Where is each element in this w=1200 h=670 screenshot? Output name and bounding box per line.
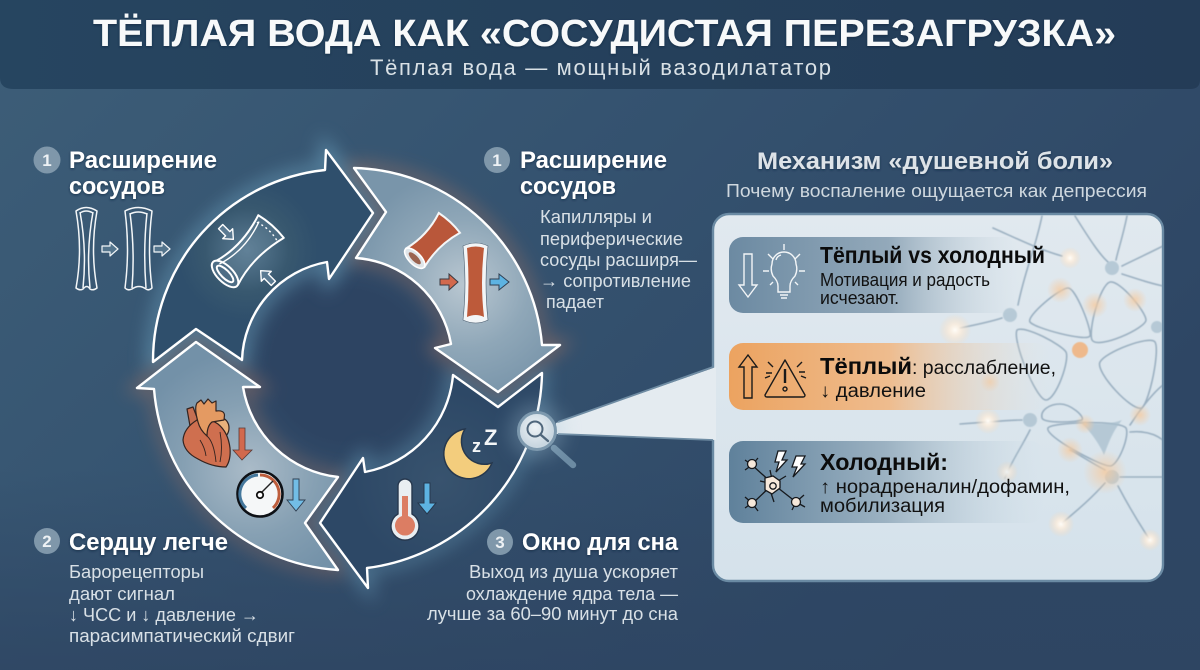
neuron network [939,216,1163,551]
body: падает [546,292,604,312]
badge [34,146,60,174]
body: : расслабление, [912,358,1056,379]
subtitle: Тёплая вода — мощный вазодилататор [370,55,831,80]
icon: red tube [400,212,461,272]
badge: 1 [492,151,502,170]
badge: 2 [42,532,52,551]
badge: 1 [42,151,52,170]
arrow: step 1 light [354,168,560,392]
icon: gauge [238,472,282,516]
title: Холодный: [820,449,948,475]
sub heading: Почему воспаление ощущается как депрессия [726,181,1147,201]
narrow vessel [76,208,97,290]
icon: vessels narrow to wide [76,208,170,290]
banner background [0,0,1200,89]
body [820,358,1056,402]
body [427,562,679,624]
icon: blue down arrow [418,483,436,514]
heading: сосудов [520,173,616,200]
arrow [102,242,118,256]
icon: z z [472,425,497,456]
body: дают сигнал [69,584,175,604]
header banner [0,0,1200,89]
heading: Окно для сна [522,529,679,556]
icon: up arrow [739,355,757,398]
body: исчезают. [820,288,899,308]
icon: z z: Z [484,425,497,450]
title: Тёплый [820,353,912,379]
small arrow [216,222,238,244]
step 1 right label [484,147,697,312]
title: ТЁПЛАЯ ВОДА КАК «СОСУДИСТАЯ ПЕРЕЗАГРУЗКА» [93,12,1116,55]
icon: magnifier [509,403,573,465]
icon: red arrow [440,274,458,290]
body: Барорецепторы [69,562,204,582]
body: ↓ ЧСС и ↓ давление → [69,605,259,625]
body [820,270,990,308]
body: лучше за 60–90 минут до сна [427,604,679,624]
arrow: step 3 dark [320,373,542,588]
body [820,477,1070,517]
icon: warning triangle [765,360,806,397]
icon: z z: z [472,436,481,456]
body: Мотивация и радость [820,270,990,290]
step 2 label [34,528,295,646]
body: сосуды расширя— [540,250,697,270]
icon: vessel tube [207,213,285,292]
icon: thermometer [391,479,419,540]
icon: blue arrow [490,274,509,290]
cycle glows [137,150,560,588]
body: → сопротивление [540,271,691,291]
title: Тёплый vs холодный [820,242,1045,268]
row: cold [729,441,1070,523]
body: ↑ норадреналин/дофамин, [820,477,1070,498]
heading: Расширение [520,147,667,174]
panel body [713,214,1163,581]
icon: moon [444,429,492,479]
row: warm vs cold [729,237,1045,313]
body: охлаждение ядра тела — [466,584,678,604]
step 3 label [427,529,679,624]
body: Капилляры и [540,207,652,227]
body: Выход из душа ускоряет [469,562,678,582]
small arrow [256,266,278,288]
heading: сосудов [69,173,165,200]
badge: 3 [495,533,505,552]
body: мобилизация [820,496,945,517]
badge [484,147,510,173]
icon: heart [183,399,230,467]
arrow: step 2 light [137,342,338,570]
mechanism heading [726,148,1147,201]
callout pointer [556,367,716,440]
heading: Расширение [69,147,217,174]
wide vessel [125,208,152,290]
icon: neurons with lightning [745,451,805,511]
heading [520,147,667,200]
body [69,562,295,646]
icon: down arrow [739,254,757,297]
body [540,207,697,312]
badge [34,528,60,554]
panel: mechanism [556,214,1163,581]
arrow: step 1 dark [153,150,373,362]
body: ↓ давление [820,381,926,402]
icon: blue down arrow [287,479,305,511]
body: парасимпатический сдвиг [69,626,295,646]
icon: light bulb [763,244,805,298]
step 1 left label [34,146,217,200]
heading: Сердцу легче [69,529,228,556]
heading [69,147,217,200]
arrow [154,242,170,256]
row: warm [729,343,1056,410]
icon: red vessel [463,243,488,323]
heading: Механизм «душевной боли» [757,148,1113,175]
body: периферические [540,229,683,249]
icon: red down arrow [233,428,252,460]
badge [487,529,513,555]
